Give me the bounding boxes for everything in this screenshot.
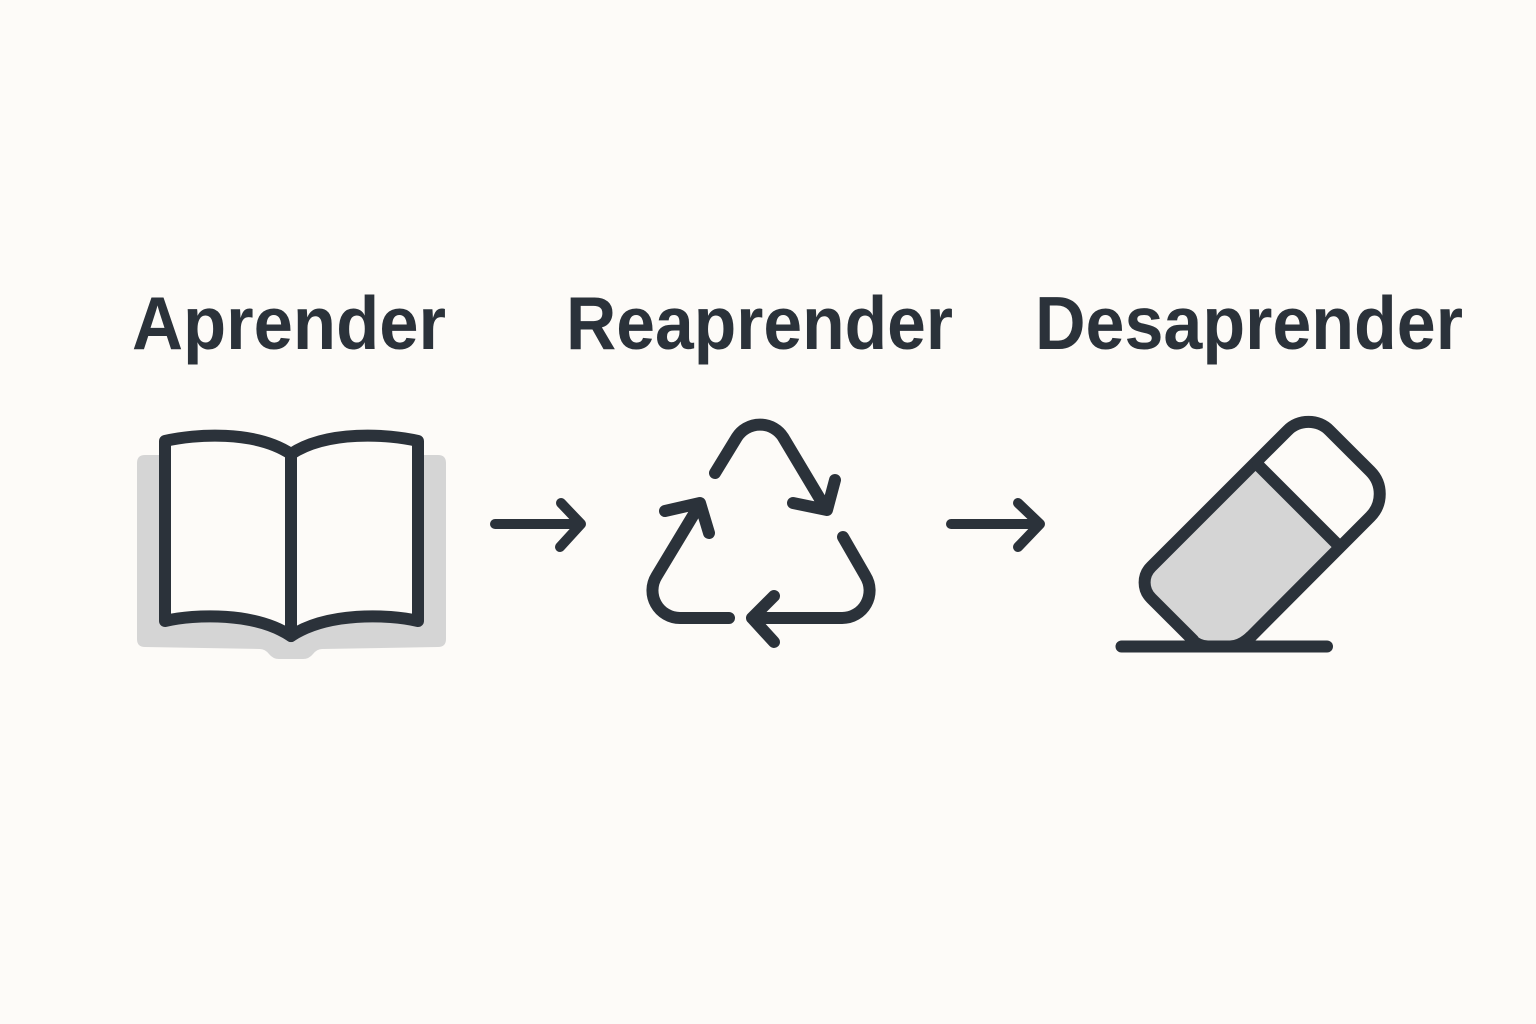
book shadow — [137, 455, 446, 659]
recycling arrow: left — [652, 503, 729, 618]
book outline — [165, 436, 418, 636]
eraser divider — [1258, 465, 1338, 545]
icon: open book — [137, 436, 446, 659]
eraser gray body — [1145, 465, 1338, 640]
eraser outline — [1145, 422, 1380, 640]
eraser base line — [1122, 640, 1327, 652]
eraser inner corner fill — [1187, 622, 1254, 641]
recycling arrow: top — [715, 425, 835, 510]
heading: Desaprender: Desaprender — [1035, 281, 1463, 365]
icon: recycling triangle arrows — [652, 425, 870, 642]
book spine — [285, 454, 297, 636]
recycling arrow: bottom — [752, 537, 870, 642]
icon: eraser — [1122, 422, 1380, 646]
arrow: aprender to reaprender — [495, 503, 581, 547]
heading: Reaprender: Reaprender — [566, 281, 953, 365]
book pages — [165, 436, 418, 636]
arrow: reaprender to desaprender — [951, 503, 1040, 547]
heading: Aprender: Aprender — [132, 281, 446, 365]
